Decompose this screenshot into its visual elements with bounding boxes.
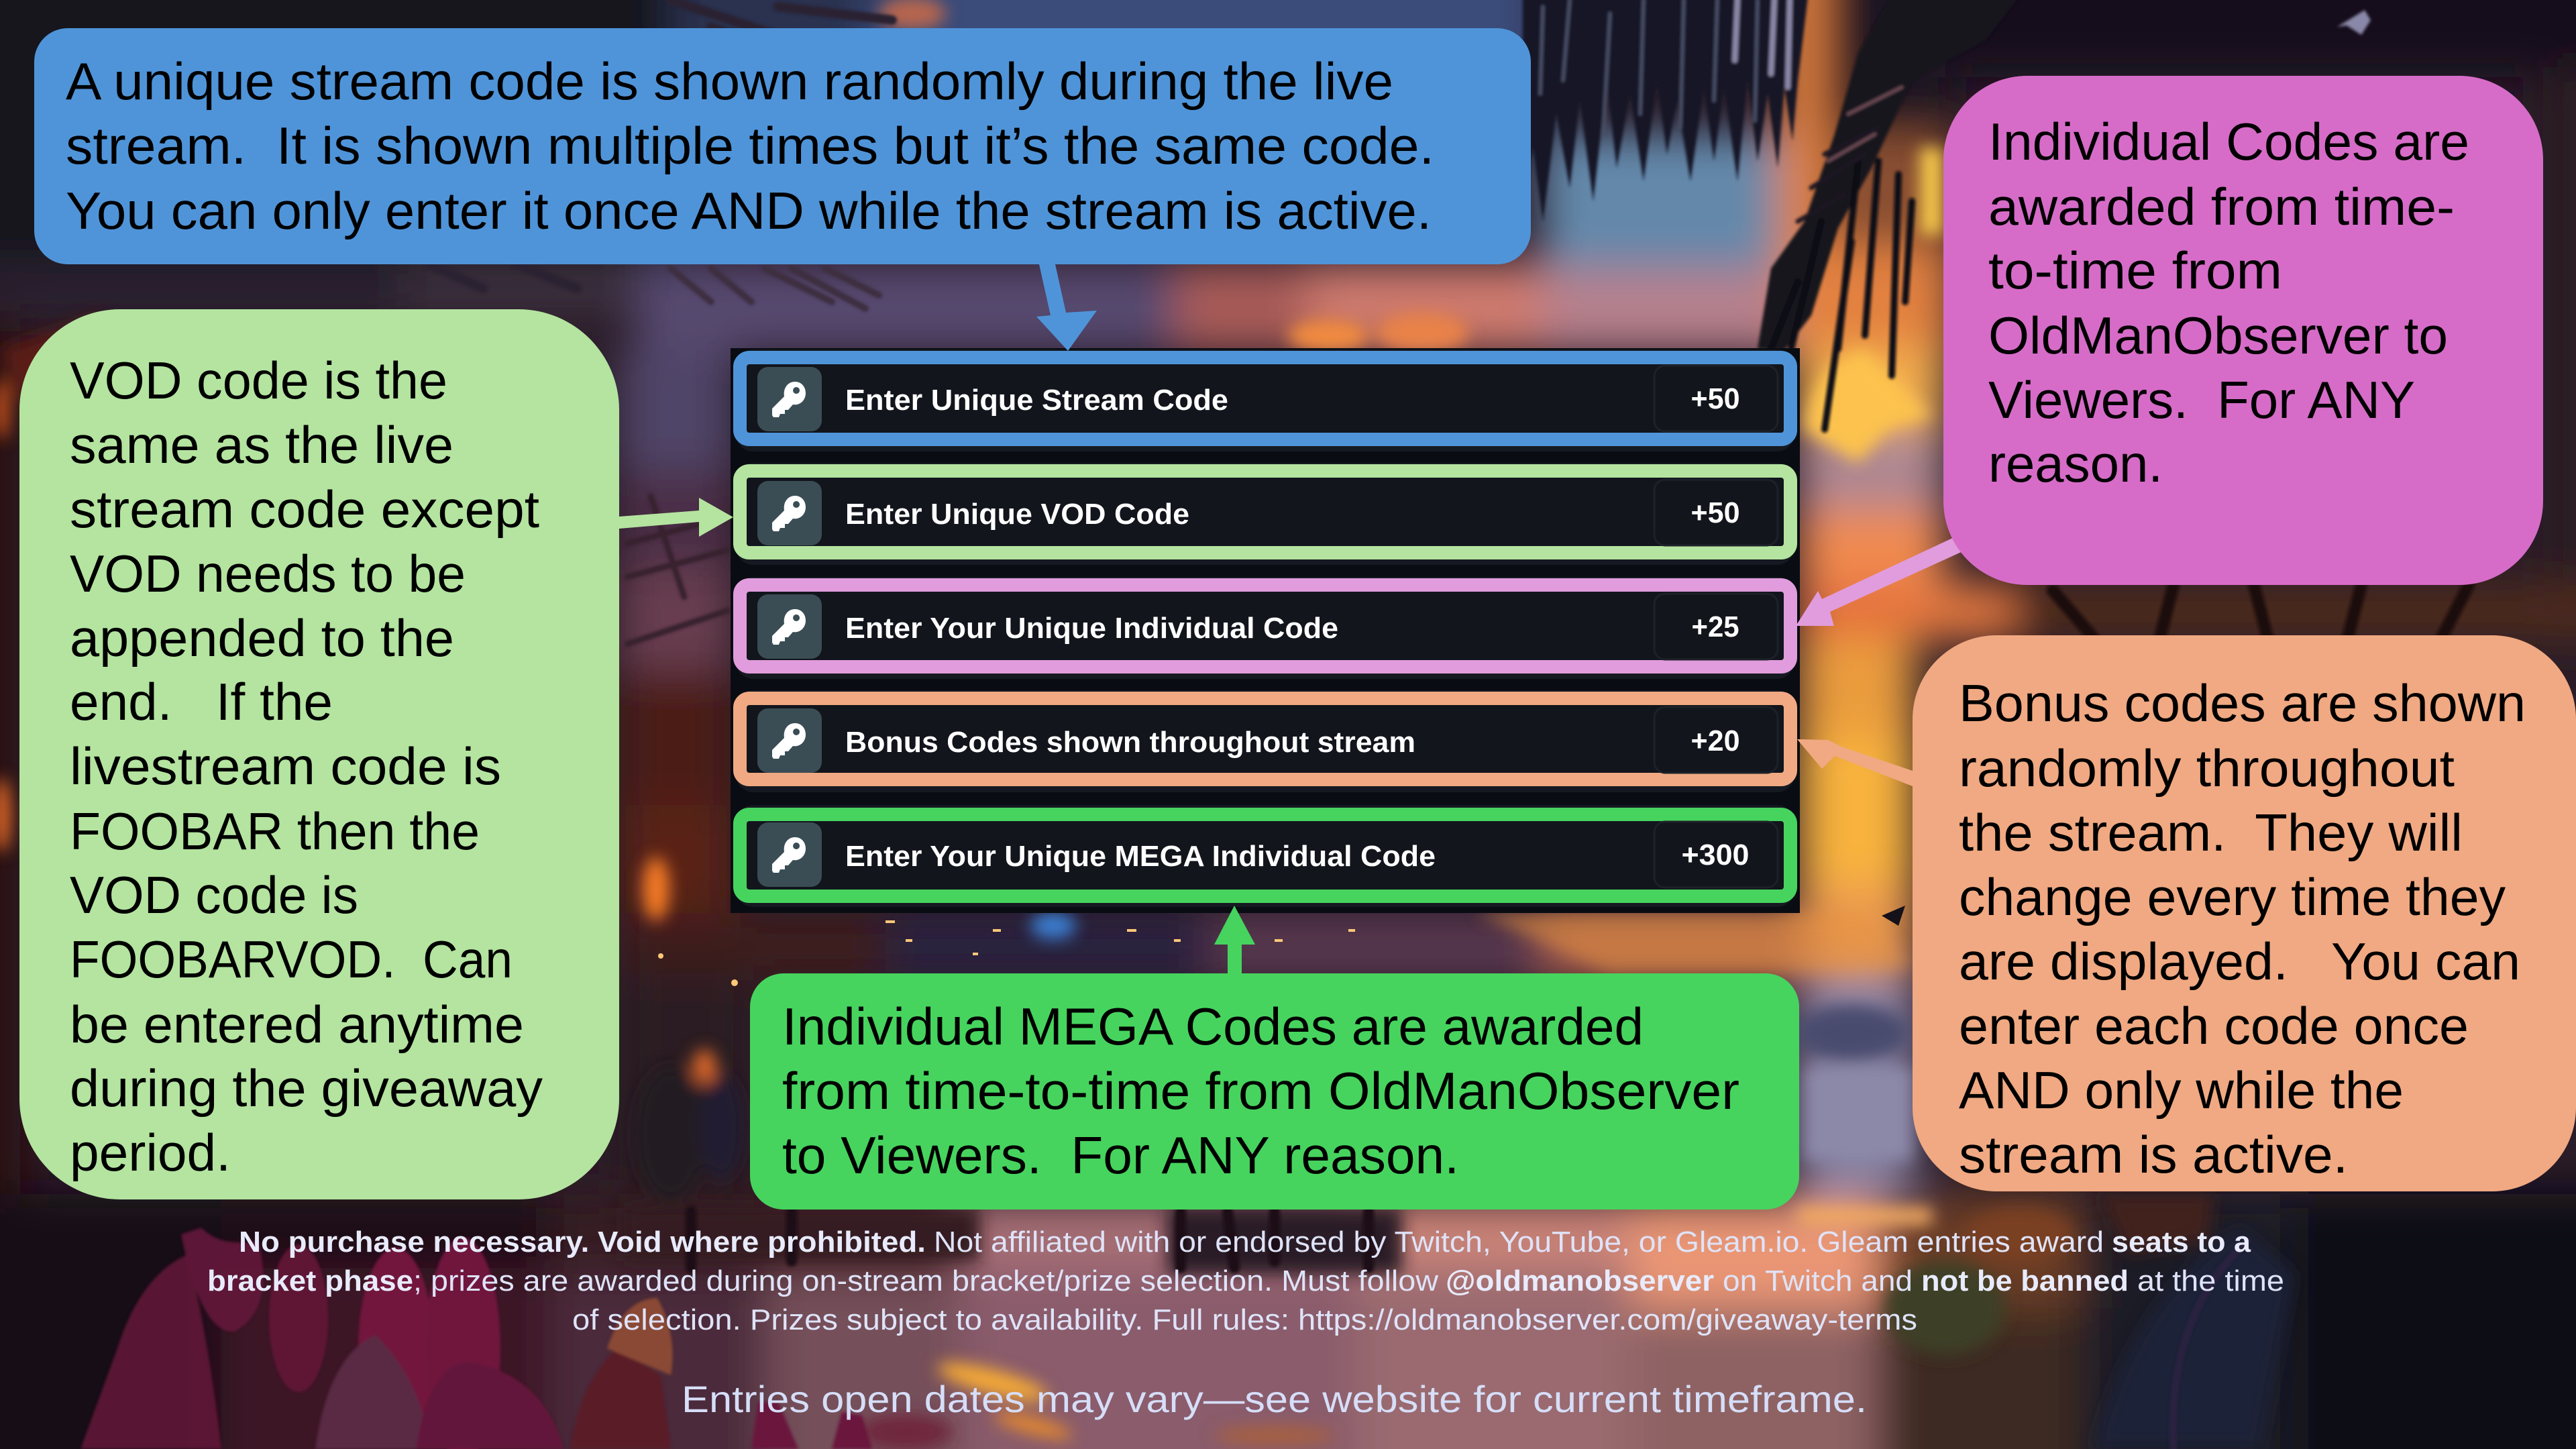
row: stream code [736,350,1794,451]
callout: bonus codes: enter each code once [1959,996,2469,1055]
callout: stream code: A unique stream code is shown randomly during the live [66,52,1393,111]
callout: bonus codes [1913,635,2576,1191]
legal disclaimer [207,1226,2284,1336]
callout: bonus codes: stream is active. [1959,1125,2348,1184]
callout: bonus codes: randomly throughout [1959,739,2455,798]
row: bonus codes: Bonus Codes shown throughout stream [845,726,1415,759]
callout: VOD code: end. If the [70,672,333,731]
callout: VOD code: stream code except [70,480,539,539]
callout: VOD code: VOD code is [70,865,358,924]
row: bonus codes [736,690,1794,792]
callout: VOD code: appended to the [70,608,454,667]
callout: VOD code: FOOBAR then the [70,802,480,861]
callout: MEGA codes: to Viewers. For ANY reason. [782,1126,1459,1185]
row: mega code: Enter Your Unique MEGA Individual Code [845,840,1436,873]
callout: VOD code [19,309,619,1199]
row: VOD code [736,463,1794,565]
callout: individual codes: Individual Codes are [1988,112,2469,171]
legal disclaimer: No purchase necessary. Void where prohibited. [239,1226,926,1258]
callout: bonus codes: AND only while the [1959,1061,2404,1120]
arrow: bonus codes [1797,739,1913,786]
callout: individual codes: Viewers. For ANY [1988,370,2415,429]
legal disclaimer: seats to a [2112,1226,2251,1258]
callout: VOD code: be entered anytime [70,995,524,1054]
callout: bonus codes: change every time they [1959,867,2506,926]
callout: individual codes [1943,76,2543,585]
callout: VOD code: VOD needs to be [70,544,466,603]
arrow: individual code [1796,537,1966,626]
callout: individual codes: reason. [1988,434,2163,493]
row: mega code: +300 [1681,839,1750,871]
callout: bonus codes: Bonus codes are shown [1959,674,2526,733]
legal disclaimer: not be banned [1921,1265,2129,1297]
row: individual code: +25 [1692,610,1739,643]
row: mega code [736,805,1794,907]
callout: VOD code: during the giveaway [70,1059,543,1118]
callout: VOD code: VOD code is the [70,351,447,410]
callout: individual codes: OldManObserver to [1988,306,2448,365]
row: individual code: Enter Your Unique Individual Code [845,612,1338,645]
callout: individual codes: to-time from [1988,241,2282,300]
callout: VOD code: livestream code is [70,737,501,796]
row: VOD code: Enter Unique VOD Code [845,498,1189,531]
arrow: VOD code [619,498,733,537]
callout: VOD code: FOOBARVOD. Can [70,930,513,989]
legal disclaimer: @oldmanobserver [1446,1265,1714,1297]
arrow: mega code [1214,906,1255,973]
city lights and bird [658,906,1905,986]
callout: stream code [34,28,1531,264]
callout: stream code: You can only enter it once AND while the stream is active. [66,181,1432,240]
callout: bonus codes: the stream. They will [1959,803,2463,862]
entries note: Entries open dates may vary—see website for current timeframe. [682,1378,1867,1420]
callout: individual codes: awarded from time- [1988,177,2455,236]
legal disclaimer: at the time [2137,1265,2284,1297]
legal disclaimer: bracket phase [207,1265,413,1297]
legal disclaimer: on Twitch and [1723,1265,1913,1297]
row: bonus codes: +20 [1690,724,1740,757]
callout: MEGA codes: from time-to-time from OldManObserver [782,1061,1739,1120]
row: VOD code: +50 [1690,496,1740,529]
callout: bonus codes: are displayed. You can [1959,932,2520,991]
legal disclaimer: Not affiliated with or endorsed by Twitch, YouTube, or Gleam.io. Gleam entries award [934,1226,2104,1258]
callout: VOD code: period. [70,1123,231,1182]
callout: MEGA codes [750,973,1799,1210]
callout: VOD code: same as the live [70,415,453,474]
palm fronds [429,0,2469,1449]
legal disclaimer: ; prizes are awarded during on-stream bracket/prize selection. Must follow [413,1265,1438,1297]
row: individual code [736,577,1794,679]
row: stream code: +50 [1690,382,1740,415]
arrow: stream code [1036,264,1097,351]
callout: stream code: stream. It is shown multiple times but it’s the same code. [66,116,1434,175]
flowers [80,1228,872,1449]
legal disclaimer: of selection. Prizes subject to availability. Full rules: https://oldmanobserver.com/giveaway-terms [572,1303,1917,1336]
code entry panel [731,348,1800,913]
callout: MEGA codes: Individual MEGA Codes are awarded [782,997,1644,1056]
row: stream code: Enter Unique Stream Code [845,384,1228,417]
